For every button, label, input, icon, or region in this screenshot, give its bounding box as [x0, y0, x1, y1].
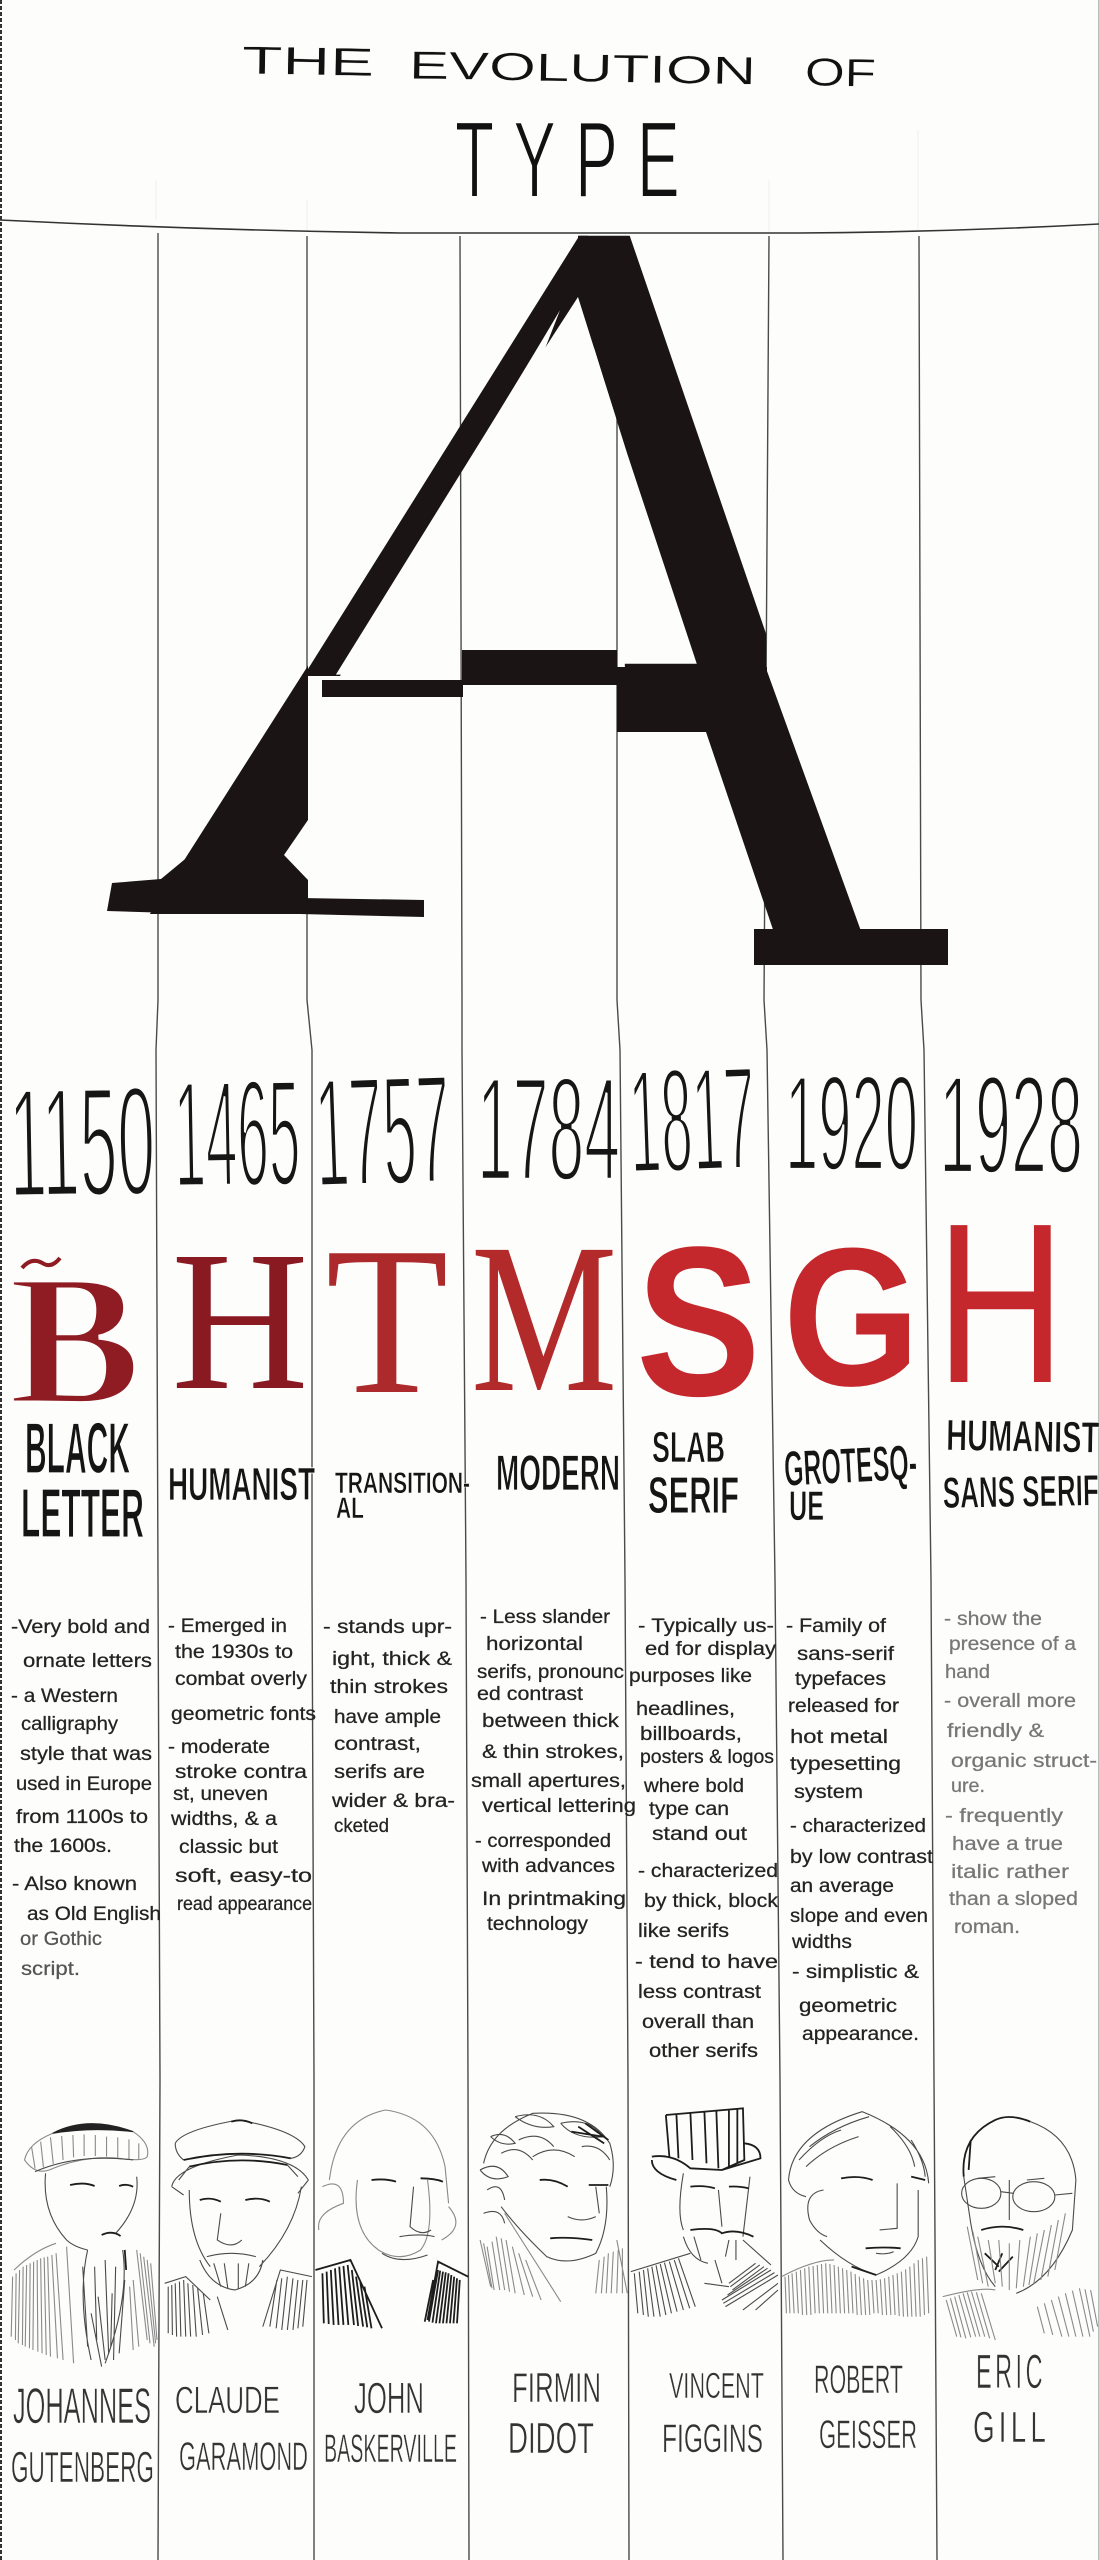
heading: transitional: TRANSITION- [335, 1467, 470, 1500]
description text: - moderate [168, 1737, 270, 1758]
title line: the evolution of: EVOLUTION [409, 44, 756, 94]
year 1465: 1465 [173, 1047, 302, 1220]
description text: than a sloped [949, 1889, 1078, 1910]
description text [786, 1616, 934, 2045]
name: Firmin Didot: FIRMIN [512, 2364, 601, 2411]
title word: type: TYPE [455, 98, 699, 220]
description text: other serifs [649, 2041, 758, 2062]
description text: - Also known [12, 1874, 137, 1895]
description text: classic but [179, 1837, 279, 1858]
description text: technology [487, 1914, 589, 1935]
description text: cketed [334, 1816, 389, 1837]
description text [471, 1607, 636, 1935]
description text: between thick [482, 1711, 620, 1732]
description text: typesetting [790, 1754, 901, 1775]
description text: from 1100s to [16, 1807, 148, 1828]
description text: stand out [652, 1824, 748, 1845]
description text: serifs are [334, 1762, 425, 1783]
panel: column 6 grotesque [782, 1048, 934, 2457]
letter sample H: H [171, 1211, 309, 1432]
description text [629, 1616, 779, 2062]
description text: wider & bra- [331, 1791, 455, 1812]
description text: - Family of [786, 1616, 887, 1637]
big letter A built from column strips: A [10, 6, 825, 1190]
heading: humanist sans serif: HUMANIST [946, 1411, 1099, 1463]
description text: - a Western [11, 1686, 118, 1707]
description text: posters & logos [640, 1747, 774, 1768]
name: Firmin Didot: DIDOT [508, 2414, 594, 2463]
title line: the evolution of: OF [805, 51, 876, 96]
description text: ight, thick & [332, 1649, 452, 1670]
description text: like serifs [638, 1921, 729, 1942]
description text: - frequently [945, 1806, 1064, 1827]
portrait: Johannes Gutenberg [11, 2124, 157, 2367]
description text: system [794, 1782, 863, 1803]
name: Vincent Figgins: FIGGINS [662, 2415, 763, 2461]
name: Vincent Figgins: VINCENT [669, 2367, 764, 2407]
description text: small apertures, [471, 1771, 626, 1792]
description text: - Less slander [480, 1607, 611, 1628]
letter sample T: T [326, 1203, 448, 1438]
description text: read appearance [177, 1894, 312, 1915]
year 1817: 1817 [626, 1035, 758, 1204]
description text: serifs, pronounc [477, 1662, 624, 1683]
heading: black letter: LETTER [21, 1473, 144, 1552]
heading: slab serif: SLAB [652, 1423, 725, 1472]
name: Claude Garamond: CLAUDE [175, 2380, 280, 2422]
description text: have a true [952, 1834, 1063, 1855]
big letter A built from column strips: A [331, 6, 926, 1190]
description text: sans-serif [797, 1644, 895, 1665]
name: John Baskerville [324, 2374, 457, 2471]
year 1150: 1150 [8, 1055, 157, 1231]
name: John Baskerville: BASKERVILLE [324, 2425, 457, 2471]
description text: stroke contra [175, 1762, 308, 1783]
description text: typefaces [795, 1669, 886, 1690]
description text: - corresponded [475, 1831, 611, 1852]
big letter A built from column strips: A [288, 6, 922, 1190]
description text: - overall more [944, 1691, 1076, 1712]
panel: column 4 modern [471, 1046, 636, 2463]
description text: In printmaking [482, 1889, 626, 1910]
description text: - simplistic & [792, 1962, 919, 1983]
heading: transitional [335, 1467, 470, 1525]
year 1757: 1757 [312, 1043, 453, 1221]
description text: type can [649, 1799, 729, 1820]
heading: humanist sans serif: SANS SERIF [942, 1467, 1099, 1518]
portrait: Firmin Didot [480, 2113, 627, 2302]
description text: widths, & a [170, 1809, 277, 1830]
description text: style that was [20, 1744, 152, 1765]
description text: hot metal [790, 1727, 888, 1748]
letter sample B: B [8, 1235, 141, 1444]
description text: - Emerged in [168, 1616, 287, 1637]
letter sample H: H [936, 1176, 1065, 1431]
description text: italic rather [951, 1862, 1070, 1883]
description text: - tend to have [635, 1952, 778, 1973]
heading: slab serif [648, 1423, 739, 1525]
description text: -Very bold and [11, 1617, 150, 1638]
description text [168, 1616, 316, 1915]
title [242, 39, 876, 220]
description text: - characterized [790, 1816, 926, 1837]
description text: friendly & [947, 1721, 1044, 1742]
description text: roman. [954, 1917, 1020, 1938]
name: Vincent Figgins [662, 2367, 764, 2461]
description text [11, 1617, 161, 1980]
description text: hand [945, 1662, 990, 1683]
description text [323, 1617, 455, 1837]
description text: - characterized [638, 1861, 778, 1882]
description text: geometric fonts [171, 1704, 316, 1725]
heading: humanist sans serif [942, 1411, 1099, 1518]
year 1920: 1920 [785, 1048, 918, 1200]
description text: ed for display [645, 1639, 777, 1660]
panel: column 3 transitional [312, 1043, 470, 2471]
heading: grotesque [783, 1436, 918, 1529]
description text: - show the [944, 1609, 1042, 1630]
title line: the evolution of: THE [242, 39, 374, 85]
description text: ed contrast [477, 1684, 584, 1705]
description text: headlines, [636, 1699, 735, 1720]
name: Eric Gill: ERIC [976, 2345, 1046, 2398]
description text: - stands upr- [323, 1617, 452, 1638]
name: John Baskerville: JOHN [354, 2374, 424, 2423]
name: Johannes Gutenberg: JOHANNES [13, 2380, 151, 2435]
description text: the 1930s to [175, 1642, 293, 1663]
description text [944, 1609, 1097, 1938]
description text: widths [791, 1932, 852, 1953]
description text: by low contrast [790, 1847, 934, 1868]
letter sample M: M [471, 1201, 617, 1437]
heading: modern: MODERN [496, 1447, 620, 1502]
portrait: Claude Garamond [165, 2120, 312, 2337]
name: Firmin Didot [508, 2364, 601, 2463]
description text: st, uneven [173, 1784, 268, 1805]
heading: transitional: AL [336, 1492, 364, 1525]
description text: where bold [643, 1776, 744, 1797]
description text: used in Europe [16, 1774, 152, 1795]
description text: by thick, block [644, 1891, 779, 1912]
heading: black letter: BLACK [25, 1409, 130, 1489]
heading: grotesque: GROTESQ- [783, 1436, 918, 1498]
year 1928: 1928 [939, 1047, 1083, 1203]
description text: geometric [799, 1996, 897, 2017]
description text: appearance. [802, 2024, 919, 2045]
letter sample G: G [783, 1207, 920, 1427]
name: Robert Geisser [814, 2356, 917, 2457]
description text: soft, easy-to [175, 1866, 312, 1887]
portrait: Vincent Figgins [631, 2108, 778, 2317]
description text: slope and even [790, 1906, 928, 1927]
title line: the evolution of [242, 39, 876, 96]
description text: the 1600s. [14, 1836, 112, 1857]
heading: slab serif: SERIF [648, 1467, 739, 1525]
description text: horizontal [486, 1634, 583, 1655]
panel: column 2 humanist [165, 1047, 316, 2479]
description text: purposes like [629, 1666, 752, 1687]
name: Robert Geisser: GEISSER [819, 2411, 917, 2457]
name: Robert Geisser: ROBERT [814, 2356, 903, 2402]
description text: or Gothic [20, 1929, 102, 1950]
heading: humanist: HUMANIST [168, 1458, 315, 1510]
panel: column 7 humanist sans serif [936, 1047, 1099, 2452]
portrait: John Baskerville [315, 2110, 468, 2328]
description text: calligraphy [21, 1714, 119, 1735]
name: Johannes Gutenberg [11, 2380, 154, 2492]
description text: have ample [334, 1707, 441, 1728]
name: Eric Gill: GILL [973, 2403, 1050, 2452]
description text: less contrast [638, 1982, 762, 2003]
letter sample S: S [636, 1204, 761, 1441]
description text: vertical lettering [482, 1796, 636, 1817]
description text: script. [21, 1959, 80, 1980]
description text: organic struct- [951, 1751, 1097, 1772]
portrait: Eric Gill [943, 2117, 1098, 2340]
description text: released for [788, 1696, 900, 1717]
description text: & thin strokes, [482, 1742, 624, 1763]
panel: column 1 blackletter [8, 1055, 161, 2492]
portrait: Robert Geisser [782, 2112, 929, 2317]
description text: - Typically us- [638, 1616, 774, 1637]
description text: thin strokes [330, 1677, 448, 1698]
year 1784: 1784 [477, 1046, 620, 1211]
description text: an average [790, 1876, 894, 1897]
description text: ornate letters [23, 1651, 152, 1672]
name: Eric Gill [973, 2345, 1050, 2452]
description text: overall than [642, 2012, 754, 2033]
heading: black letter [21, 1409, 144, 1552]
name: Johannes Gutenberg: GUTENBERG [11, 2443, 154, 2492]
description text: combat overly [175, 1669, 308, 1690]
description text: presence of a [949, 1634, 1076, 1655]
heading: grotesque: UE [789, 1482, 824, 1529]
name: Claude Garamond: GARAMOND [179, 2433, 308, 2479]
name: Claude Garamond [175, 2380, 308, 2479]
description text: contrast, [334, 1734, 421, 1755]
description text: with advances [481, 1856, 615, 1877]
description text: billboards, [640, 1724, 742, 1745]
description text: as Old English [27, 1904, 161, 1925]
panel: column 5 slab serif [626, 1035, 779, 2461]
description text: ure. [951, 1776, 985, 1797]
